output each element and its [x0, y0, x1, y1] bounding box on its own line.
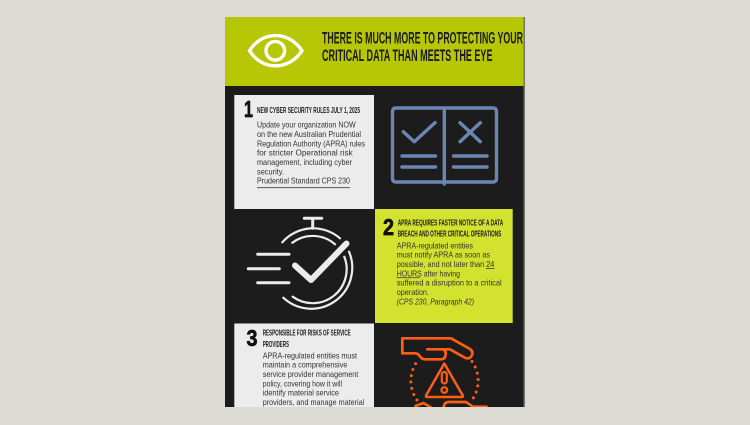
- body text 1: on the new Australian Prudential: [257, 129, 361, 139]
- body text 2: possible, and not later than 24: [397, 259, 495, 269]
- panel: faster breach notice: [375, 209, 513, 323]
- page background: [225, 17, 524, 407]
- body text 3: [263, 350, 364, 407]
- body text 2: suffered a disruption to a critical: [397, 278, 502, 288]
- icon: eye: [250, 36, 302, 66]
- body text 2: (CPS 230, Paragraph 42): [397, 296, 474, 306]
- body text 1: Regulation Authority (APRA) rules: [257, 138, 365, 148]
- body text 1: [257, 120, 365, 188]
- heading 1: NEW CYBER SECURITY RULES JULY 1, 2025: [257, 106, 360, 115]
- heading 3: PROVIDERS: [263, 340, 289, 349]
- body text 3: maintain a comprehensive: [263, 360, 348, 370]
- title: [322, 30, 523, 65]
- body text 3: policy, covering how it will: [263, 378, 342, 388]
- body text 3: identify material service: [263, 388, 339, 398]
- body text 1: Update your organization NOW: [257, 120, 356, 130]
- infographic page: [225, 17, 525, 407]
- body text 3: providers, and manage material: [263, 397, 364, 407]
- body text 2: must notify APRA as soon as: [397, 250, 490, 260]
- body text 3: APRA-regulated entities must: [263, 350, 358, 360]
- body text 3: service provider management: [263, 369, 359, 379]
- body text 1: management, including cyber: [257, 157, 352, 167]
- heading 2: BREACH AND OTHER CRITICAL OPERATIONS: [398, 229, 502, 238]
- body text 2: APRA-regulated entities: [397, 240, 473, 250]
- icon: stopwatch with check mark: [248, 218, 352, 309]
- heading 3: [263, 330, 350, 347]
- panel: responsible for service providers: [234, 324, 374, 408]
- heading 2: APRA REQUIRES FASTER NOTICE OF A DATA: [398, 218, 503, 227]
- body text 1: security.: [257, 166, 284, 176]
- number 3: 3: [246, 325, 258, 351]
- body text 1: Prudential Standard CPS 230: [257, 176, 350, 186]
- heading 2: [398, 218, 503, 238]
- icon: open book with check and cross: [392, 108, 496, 184]
- body text 2: operation.: [397, 287, 429, 297]
- icon: hand over warning triangle: [402, 338, 486, 408]
- heading 3: RESPONSIBLE FOR RISKS OF SERVICE: [263, 328, 351, 338]
- number 1: 1: [244, 96, 253, 122]
- header band: [225, 17, 524, 86]
- body text 1: for stricter Operational risk: [257, 148, 353, 158]
- body text 2: HOURS after having: [397, 268, 460, 278]
- title: THERE IS MUCH MORE TO PROTECTING YOUR: [322, 30, 523, 48]
- title: CRITICAL DATA THAN MEETS THE EYE: [322, 47, 492, 65]
- panel: new cyber security rules: [234, 95, 374, 209]
- body text 2: [397, 240, 502, 306]
- number 2: 2: [383, 214, 394, 240]
